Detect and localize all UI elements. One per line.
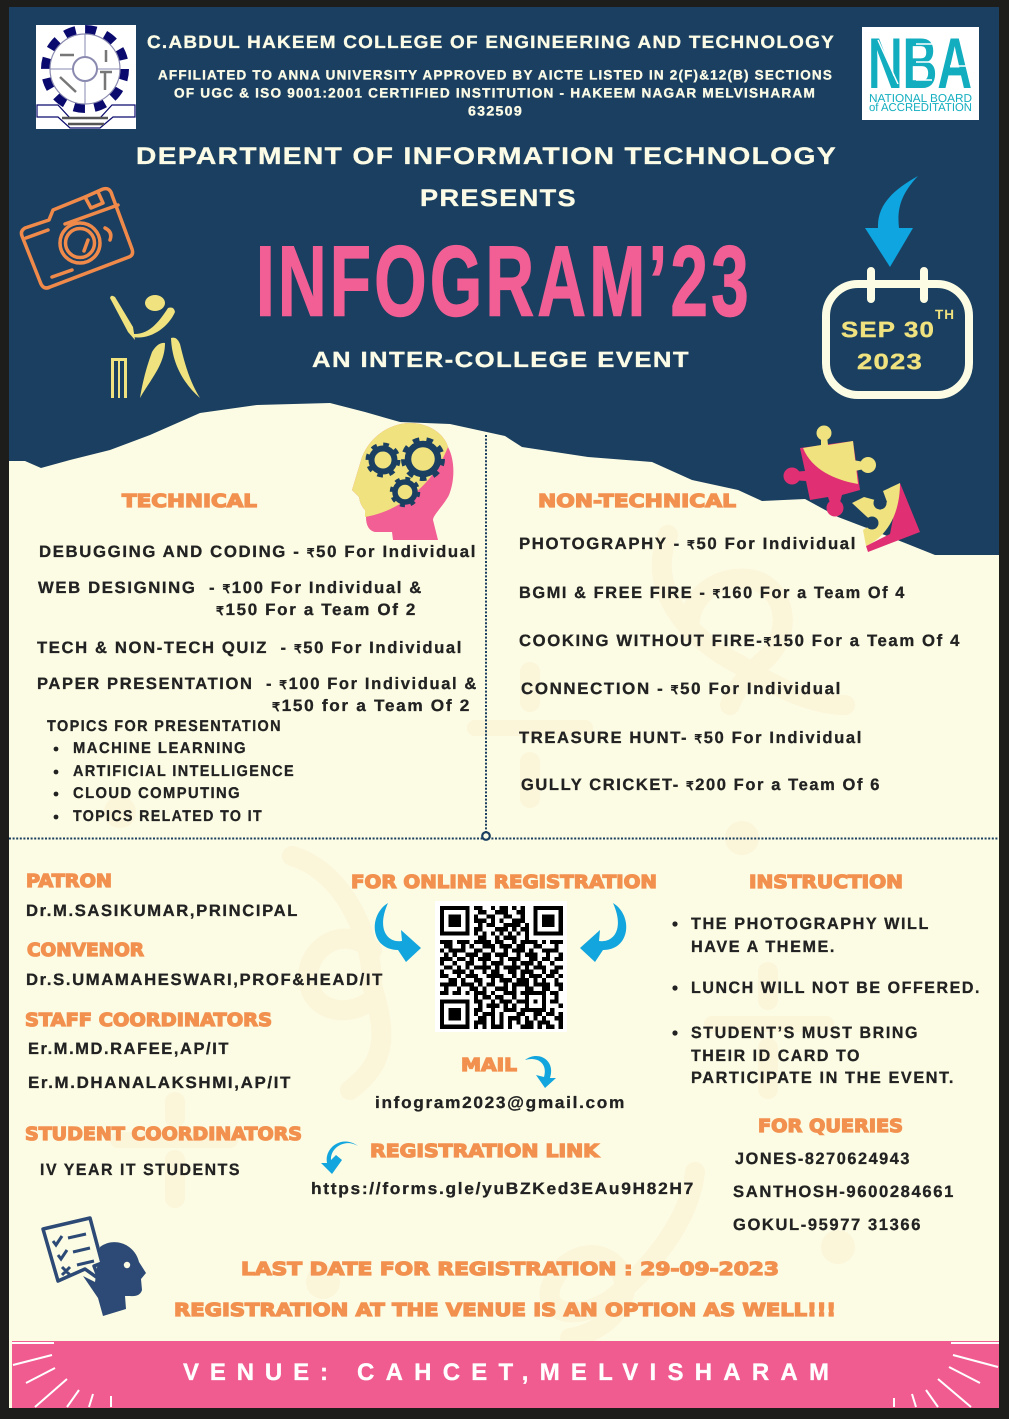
- panel: online registration: [311, 872, 695, 1198]
- panel: organisers: [25, 871, 384, 1179]
- instruction bullets: THEIR ID CARD TO: [691, 1047, 861, 1065]
- heading: instruction: INSTRUCTION: [749, 872, 903, 893]
- instruction bullets: LUNCH WILL NOT BE OFFERED.: [691, 979, 981, 997]
- panel: non-technical events: [519, 491, 961, 794]
- instruction bullets: HAVE A THEME.: [691, 938, 836, 956]
- convenor: Dr.S.UMAMAHESWARI,PROF&HEAD/IT: [26, 971, 384, 989]
- panel: instructions: [672, 872, 981, 1087]
- contact numbers: GOKUL-95977 31366: [733, 1216, 922, 1234]
- technical events list: [37, 543, 478, 715]
- subtitle: AN INTER-COLLEGE EVENT: [312, 347, 690, 372]
- panel: queries: [733, 1116, 955, 1234]
- icon: puzzle pieces: [784, 426, 920, 552]
- technical events list: PAPER PRESENTATION - ₹100 For Individual &: [37, 675, 478, 693]
- technical events list: DEBUGGING AND CODING - ₹50 For Individual: [39, 543, 477, 561]
- registration link: REGISTRATION LINK: [370, 1141, 600, 1162]
- logo: NBA: of ACCREDITATION: [869, 102, 972, 114]
- heading: non-technical: NON-TECHNICAL: [538, 491, 736, 512]
- title: INFOGRAM’23: [256, 226, 752, 338]
- logo: college emblem: [36, 25, 136, 129]
- patron: [26, 871, 299, 920]
- navy header background with torn wave edge: [9, 7, 999, 555]
- instruction bullets: PARTICIPATE IN THE EVENT.: [691, 1069, 955, 1087]
- calendar date badge: SEP 30: [841, 317, 935, 342]
- non-technical events list: GULLY CRICKET- ₹200 For a Team Of 6: [521, 776, 881, 794]
- staff coordinators: Er.M.MD.RAFEE,AP/IT: [28, 1040, 230, 1058]
- convenor: CONVENOR: [27, 940, 144, 961]
- logo: NBA: [862, 24, 979, 120]
- presentation topics list: [47, 718, 295, 825]
- patron: Dr.M.SASIKUMAR,PRINCIPAL: [26, 902, 299, 920]
- affiliation text: 632509: [468, 104, 523, 118]
- non-technical events list: [519, 535, 961, 794]
- presentation topics list: MACHINE LEARNING: [73, 740, 247, 757]
- non-technical events list: BGMI & FREE FIRE - ₹160 For a Team Of 4: [519, 584, 906, 602]
- student coordinators: IV YEAR IT STUDENTS: [40, 1161, 241, 1179]
- affiliation text: [158, 68, 833, 118]
- mail: infogram2023@gmail.com: [375, 1094, 626, 1112]
- heading: online registration: FOR ONLINE REGISTRATION: [351, 872, 657, 893]
- staff coordinators: Er.M.DHANALAKSHMI,AP/IT: [28, 1074, 292, 1092]
- department heading: PRESENTS: [420, 185, 577, 212]
- icon: arrow to date: [865, 176, 918, 267]
- department heading: [136, 143, 837, 212]
- contact numbers: JONES-8270624943: [735, 1150, 911, 1168]
- student coordinators: STUDENT COORDINATORS: [25, 1124, 302, 1145]
- icon: cricket player: [110, 295, 200, 398]
- heading: for queries: FOR QUERIES: [758, 1116, 903, 1137]
- icon: camera: [21, 189, 133, 288]
- non-technical events list: CONNECTION - ₹50 For Individual: [521, 680, 842, 698]
- heading: technical: TECHNICAL: [122, 491, 257, 512]
- registration link: https://forms.gle/yuBZKed3EAu9H82H7: [311, 1180, 695, 1198]
- last date notice: LAST DATE FOR REGISTRATION : 29-09-2023: [241, 1259, 779, 1280]
- technical events list: ₹150 for a Team Of 2: [272, 697, 471, 715]
- instruction bullets: STUDENT’S MUST BRING: [691, 1024, 919, 1042]
- patron: PATRON: [26, 871, 112, 892]
- convenor: [26, 940, 384, 989]
- logo: NBA: NATIONAL BOARD: [869, 93, 972, 105]
- student coordinators: [25, 1124, 302, 1179]
- calendar date badge: TH: [935, 307, 955, 322]
- icon: right arrow to QR: [580, 903, 626, 962]
- affiliation text: AFFILIATED TO ANNA UNIVERSITY APPROVED BY AICTE LISTED IN 2(F)&12(B) SECTIONS: [158, 68, 833, 82]
- department heading: DEPARTMENT OF INFORMATION TECHNOLOGY: [136, 143, 837, 170]
- QR code: [435, 901, 567, 1032]
- venue banner: CAHCET,MELVISHARAM: [357, 1359, 829, 1386]
- technical events list: TECH & NON-TECH QUIZ - ₹50 For Individual: [37, 639, 463, 657]
- mail: MAIL: [461, 1055, 517, 1076]
- staff coordinators: STAFF COORDINATORS: [25, 1010, 272, 1031]
- staff coordinators: [25, 1010, 292, 1092]
- venue banner: [12, 1341, 999, 1408]
- presentation topics list: TOPICS RELATED TO IT: [73, 808, 263, 825]
- panel: technical events: [37, 491, 478, 825]
- venue banner: VENUE:: [183, 1359, 328, 1386]
- contact numbers: [733, 1150, 955, 1234]
- icon: left arrow to QR: [375, 903, 421, 962]
- venue registration notice: REGISTRATION AT THE VENUE IS AN OPTION AS WELL!!!: [174, 1300, 836, 1321]
- icon: checklist and head: [43, 1218, 146, 1316]
- presentation topics list: ARTIFICIAL INTELLIGENCE: [73, 763, 295, 780]
- instruction bullets: THE PHOTOGRAPHY WILL: [691, 915, 930, 933]
- technical events list: ₹150 For a Team Of 2: [216, 601, 417, 619]
- presentation topics list: CLOUD COMPUTING: [73, 785, 241, 802]
- icon: head with gears: [352, 423, 453, 540]
- presentation topics list: TOPICS FOR PRESENTATION: [47, 718, 282, 735]
- non-technical events list: TREASURE HUNT- ₹50 For Individual: [519, 729, 863, 747]
- instruction bullets: [672, 915, 981, 1087]
- mail: [375, 1055, 626, 1112]
- non-technical events list: COOKING WITHOUT FIRE-₹150 For a Team Of 4: [519, 632, 961, 650]
- non-technical events list: PHOTOGRAPHY - ₹50 For Individual: [519, 535, 857, 553]
- calendar date badge: [826, 271, 969, 395]
- registration link: [311, 1141, 695, 1198]
- college name heading: C.ABDUL HAKEEM COLLEGE OF ENGINEERING AND TECHNOLOGY: [147, 32, 835, 52]
- affiliation text: OF UGC & ISO 9001:2001 CERTIFIED INSTITUTION - HAKEEM NAGAR MELVISHARAM: [174, 86, 816, 100]
- contact numbers: SANTHOSH-9600284661: [733, 1183, 955, 1201]
- technical events list: WEB DESIGNING - ₹100 For Individual &: [38, 579, 423, 597]
- calendar date badge: 2023: [857, 349, 923, 374]
